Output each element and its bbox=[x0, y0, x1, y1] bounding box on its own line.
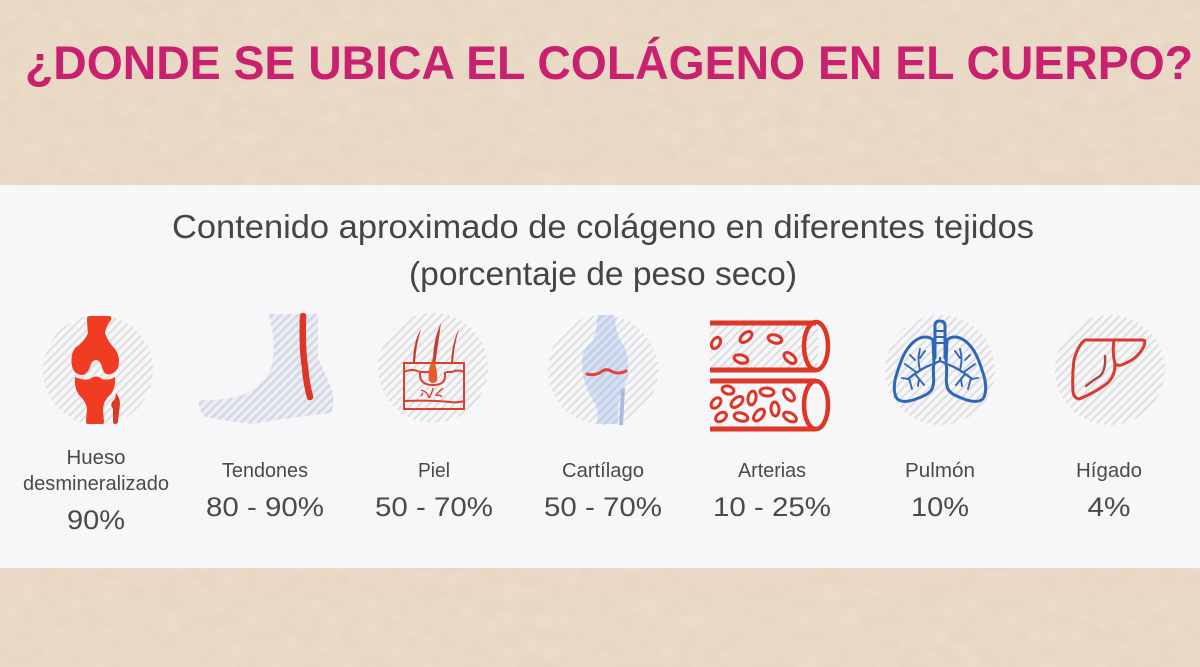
label: higado: Hígado bbox=[1076, 460, 1142, 482]
panel heading: (porcentaje de peso seco) bbox=[409, 255, 797, 292]
label: cartilago: Cartílago bbox=[562, 460, 644, 482]
label: tendones: Tendones bbox=[222, 460, 308, 482]
icon: arteries bbox=[709, 322, 828, 429]
panel heading: Contenido aproximado de colágeno en diferentes tejidos bbox=[172, 208, 1034, 245]
label: cartilago bbox=[544, 460, 662, 522]
label: tendones bbox=[206, 460, 324, 522]
label: higado: 4% bbox=[1088, 492, 1130, 522]
icon: knee bone bbox=[43, 315, 153, 425]
label: piel: 50 - 70% bbox=[375, 492, 493, 522]
label: pulmon bbox=[905, 460, 975, 522]
title: ¿DONDE SE UBICA EL COLÁGENO EN EL CUERPO? bbox=[25, 36, 1193, 89]
label: hueso desmineralizado: 90% bbox=[67, 505, 125, 535]
label: piel: Piel bbox=[418, 460, 450, 482]
icon: liver bbox=[1055, 315, 1165, 425]
label: pulmon: Pulmón bbox=[905, 460, 975, 482]
icon: skin bbox=[378, 313, 488, 423]
label: piel bbox=[375, 460, 493, 522]
label: arterias: 10 - 25% bbox=[713, 492, 831, 522]
label: hueso desmineralizado: Hueso bbox=[66, 447, 126, 469]
panel heading bbox=[172, 208, 1034, 292]
icon: lungs bbox=[885, 315, 995, 425]
label: arterias bbox=[713, 460, 831, 522]
label: pulmon: 10% bbox=[911, 492, 969, 522]
panel: collagen content bbox=[0, 185, 1200, 568]
label: tendones: 80 - 90% bbox=[206, 492, 324, 522]
label: cartilago: 50 - 70% bbox=[544, 492, 662, 522]
icon: foot with tendon bbox=[199, 314, 333, 424]
label: higado bbox=[1076, 460, 1142, 522]
label: arterias: Arterias bbox=[738, 460, 806, 482]
icon: cartilage bbox=[548, 315, 658, 425]
label: hueso desmineralizado: desmineralizado bbox=[23, 473, 169, 495]
label: hueso desmineralizado bbox=[23, 447, 169, 535]
